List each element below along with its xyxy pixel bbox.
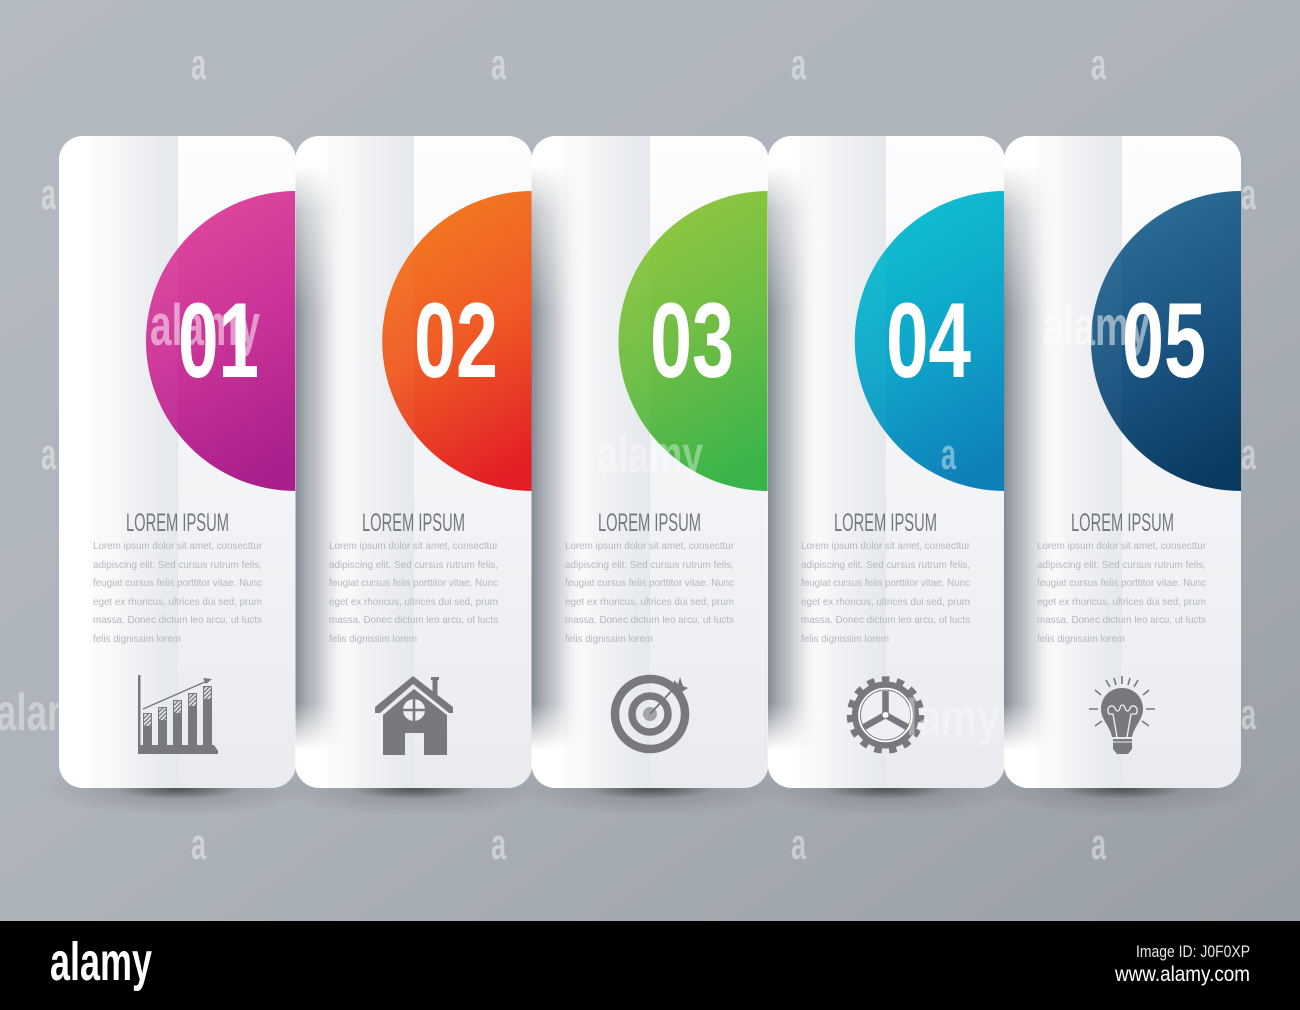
heading 2: LOREM IPSUM (362, 509, 465, 537)
watermark pattern: a (41, 170, 56, 219)
body text 1: Lorem ipsum dolor sit amet, consecttur (93, 540, 262, 552)
panel: card 1 (59, 136, 296, 788)
icon: house (375, 676, 453, 755)
watermark pattern: a (491, 40, 506, 89)
body text 5: Lorem ipsum dolor sit amet, consecttur (1037, 540, 1206, 552)
body text 5: massa. Donec dictum leo arcu, ut lucts (1037, 614, 1206, 626)
heading 3: LOREM IPSUM (598, 509, 701, 537)
panel: card 1: alamy (150, 293, 260, 358)
watermark pattern (0, 40, 1256, 869)
body text 3: adipiscing elit. Sed cursus rutrum felis, (565, 559, 734, 571)
body text 3 (565, 540, 734, 645)
number 01: 01 (178, 280, 259, 400)
body text 5: felis dignissim lorem (1037, 633, 1125, 645)
body text 4: feugiat cursus felis porttitor vitae. Nunc (801, 577, 970, 589)
body text 2 (329, 540, 498, 645)
panel: card 2 (295, 136, 532, 788)
footer bar (0, 921, 1300, 1010)
body text 1: massa. Donec dictum leo arcu, ut lucts (93, 614, 262, 626)
body text 2: adipiscing elit. Sed cursus rutrum felis, (329, 559, 498, 571)
watermark pattern: a (191, 40, 206, 89)
body text 1: feugiat cursus felis porttitor vitae. Nunc (93, 577, 262, 589)
body text 4: eget ex rhoncus, ultrices dui sed, prum (801, 596, 970, 608)
watermark pattern: a (1241, 170, 1256, 219)
body text 3: massa. Donec dictum leo arcu, ut lucts (565, 614, 734, 626)
number 04: 04 (886, 280, 971, 400)
body text 3: feugiat cursus felis porttitor vitae. Nunc (565, 577, 734, 589)
number 05: 05 (1122, 280, 1206, 400)
ground shadows (116, 779, 1184, 799)
left shadow 5 (1004, 171, 1045, 747)
footer url: www.alamy.com (1114, 963, 1250, 986)
body text 5 (1037, 540, 1206, 645)
panel: card 5: alamy (1042, 294, 1150, 357)
circle 3 (618, 191, 768, 491)
heading 1: LOREM IPSUM (126, 509, 229, 537)
watermark pattern: a (791, 40, 806, 89)
body text 1: felis dignissim lorem (93, 633, 181, 645)
number 02: 02 (414, 280, 498, 400)
body text 2: feugiat cursus felis porttitor vitae. Nunc (329, 577, 498, 589)
watermark pattern: a (1091, 40, 1106, 89)
watermark pattern: a (1241, 430, 1256, 479)
circle 5 (1091, 191, 1241, 491)
body text 3: Lorem ipsum dolor sit amet, consecttur (565, 540, 734, 552)
watermark pattern: a (1241, 690, 1256, 739)
body text 5: eget ex rhoncus, ultrices dui sed, prum (1037, 596, 1206, 608)
panel: card 3: alamy (597, 426, 703, 484)
icon: rising bar chart (138, 675, 218, 754)
watermark pattern: a (491, 820, 506, 869)
watermark pattern: a (41, 430, 56, 479)
panel: card 4: lamy (906, 689, 1000, 747)
icon: target with arrow (615, 677, 688, 749)
number 03: 03 (650, 280, 734, 400)
body text 2: felis dignissim lorem (329, 633, 417, 645)
body text 5: adipiscing elit. Sed cursus rutrum felis, (1037, 559, 1206, 571)
circle 2 (382, 191, 532, 491)
watermark pattern: a (791, 820, 806, 869)
body text 3: eget ex rhoncus, ultrices dui sed, prum (565, 596, 734, 608)
body text 5: feugiat cursus felis porttitor vitae. Nunc (1037, 577, 1206, 589)
body text 4: Lorem ipsum dolor sit amet, consecttur (801, 540, 970, 552)
left shadow 3 (532, 171, 572, 747)
body text 2: eget ex rhoncus, ultrices dui sed, prum (329, 596, 498, 608)
body text 4: adipiscing elit. Sed cursus rutrum felis, (801, 559, 970, 571)
body text 1: eget ex rhoncus, ultrices dui sed, prum (93, 596, 262, 608)
panel: card 4 (768, 136, 1005, 788)
heading 4: LOREM IPSUM (834, 509, 937, 537)
body text 1: adipiscing elit. Sed cursus rutrum felis, (93, 559, 262, 571)
left shadow 4 (768, 171, 810, 746)
soft shadow beneath the cards (43, 760, 1257, 816)
body text 1 (93, 540, 262, 645)
circle 1 (146, 191, 296, 491)
body text 4 (801, 540, 970, 645)
icon: light bulb (1089, 676, 1155, 754)
panel: card 5 (1004, 136, 1241, 788)
watermark pattern: a (191, 820, 206, 869)
footer logo: alamy (50, 932, 152, 992)
watermark pattern: alamy (0, 684, 100, 742)
panel: card 4: a (941, 430, 956, 479)
body text 2: Lorem ipsum dolor sit amet, consecttur (329, 540, 498, 552)
circle 4 (855, 191, 1005, 491)
left shadow 2 (296, 171, 336, 747)
icon: gear with spokes (850, 680, 921, 750)
body text 2: massa. Donec dictum leo arcu, ut lucts (329, 614, 498, 626)
panel: card 3 (532, 136, 768, 788)
body text 4: massa. Donec dictum leo arcu, ut lucts (801, 614, 970, 626)
body text 4: felis dignissim lorem (801, 633, 889, 645)
watermark pattern: a (1091, 820, 1106, 869)
heading 5: LOREM IPSUM (1071, 509, 1174, 537)
footer image id: Image ID: J0F0XP (1136, 942, 1250, 961)
body text 3: felis dignissim lorem (565, 633, 653, 645)
